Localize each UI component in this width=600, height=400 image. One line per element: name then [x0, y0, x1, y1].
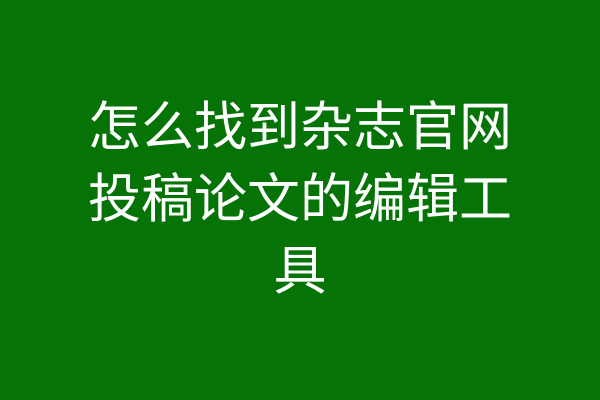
title: 投稿论文的编辑工	[88, 170, 512, 229]
title: 具	[274, 242, 326, 301]
title: 怎么找到杂志官网	[88, 98, 512, 157]
title	[88, 98, 512, 301]
